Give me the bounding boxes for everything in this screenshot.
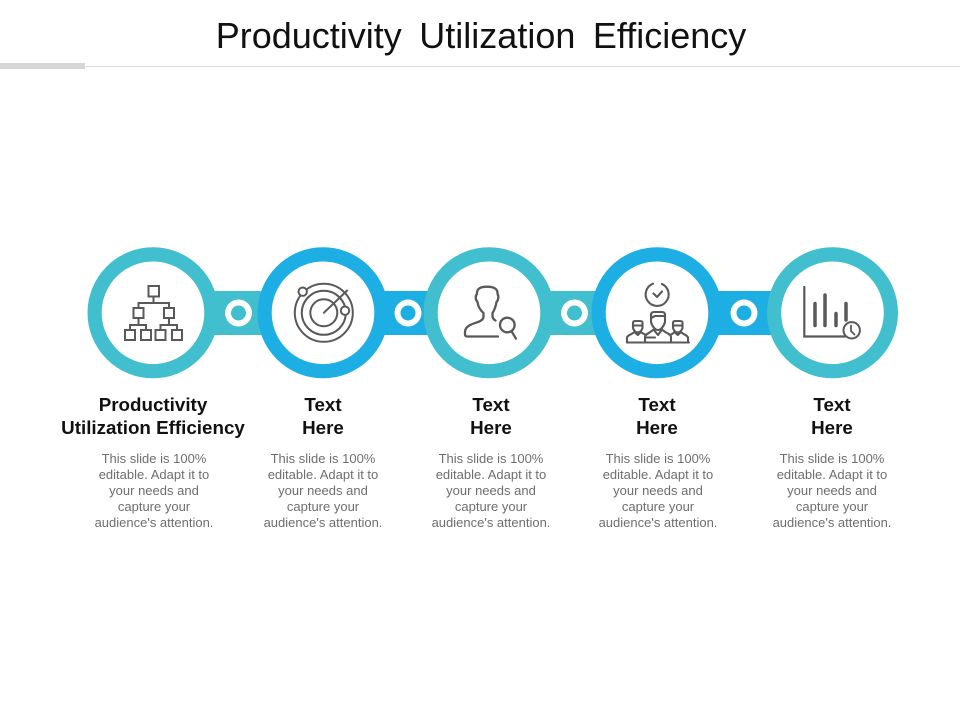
description 2: This slide is 100% bbox=[271, 451, 375, 466]
ring 2 bbox=[265, 254, 381, 371]
description 2: audience's attention. bbox=[264, 515, 382, 530]
heading 5 bbox=[811, 394, 853, 438]
icon: bar chart with clock bbox=[804, 287, 860, 338]
heading 1: Productivity bbox=[99, 394, 207, 415]
connector 1 bbox=[205, 291, 270, 335]
description 2 bbox=[264, 451, 382, 530]
description 3: audience's attention. bbox=[432, 515, 550, 530]
ring 1 bbox=[95, 254, 211, 371]
description 1 bbox=[95, 451, 213, 530]
description 4 bbox=[599, 451, 717, 530]
description 3: capture your bbox=[455, 499, 527, 514]
ring 3 bbox=[431, 254, 547, 371]
heading 3: Text bbox=[472, 394, 510, 415]
ring 5 bbox=[774, 254, 891, 371]
description 2: your needs and bbox=[278, 483, 368, 498]
description 3: This slide is 100% bbox=[439, 451, 543, 466]
heading 4 bbox=[636, 394, 678, 438]
description 4: your needs and bbox=[613, 483, 703, 498]
heading 4: Text bbox=[638, 394, 676, 415]
description 2: editable. Adapt it to bbox=[268, 467, 378, 482]
heading 2: Here bbox=[302, 417, 344, 438]
description 3: editable. Adapt it to bbox=[436, 467, 546, 482]
description 4: capture your bbox=[622, 499, 694, 514]
description 4: audience's attention. bbox=[599, 515, 717, 530]
heading 5: Text bbox=[813, 394, 851, 415]
description 5 bbox=[773, 451, 891, 530]
description 1: your needs and bbox=[109, 483, 199, 498]
heading 5: Here bbox=[811, 417, 853, 438]
icon: org chart bbox=[125, 286, 182, 340]
connector 2 bbox=[375, 291, 437, 335]
description 1: editable. Adapt it to bbox=[99, 467, 209, 482]
heading 2 bbox=[302, 394, 344, 438]
description 5: audience's attention. bbox=[773, 515, 891, 530]
header accent bar bbox=[0, 63, 85, 69]
connector 4 bbox=[709, 291, 779, 335]
icon: radar bbox=[295, 284, 353, 342]
heading 3 bbox=[470, 394, 512, 438]
heading 3: Here bbox=[470, 417, 512, 438]
heading 1 bbox=[61, 394, 245, 438]
description 4: This slide is 100% bbox=[606, 451, 710, 466]
heading 2: Text bbox=[304, 394, 342, 415]
description 5: your needs and bbox=[787, 483, 877, 498]
description 5: capture your bbox=[796, 499, 868, 514]
description 2: capture your bbox=[287, 499, 359, 514]
description 1: audience's attention. bbox=[95, 515, 213, 530]
heading 1: Utilization Efficiency bbox=[61, 417, 245, 438]
description 1: This slide is 100% bbox=[102, 451, 206, 466]
description 5: editable. Adapt it to bbox=[777, 467, 887, 482]
description 1: capture your bbox=[118, 499, 190, 514]
icon: person with magnifier bbox=[465, 287, 516, 339]
title: Productivity Utilization Efficiency bbox=[216, 15, 746, 56]
heading 4: Here bbox=[636, 417, 678, 438]
icon: team with checkmark bbox=[627, 284, 689, 342]
description 3: your needs and bbox=[446, 483, 536, 498]
connector 3 bbox=[541, 291, 605, 335]
description 4: editable. Adapt it to bbox=[603, 467, 713, 482]
header rule bbox=[85, 66, 960, 67]
ring 4 bbox=[599, 254, 715, 371]
description 3 bbox=[432, 451, 550, 530]
description 5: This slide is 100% bbox=[780, 451, 884, 466]
